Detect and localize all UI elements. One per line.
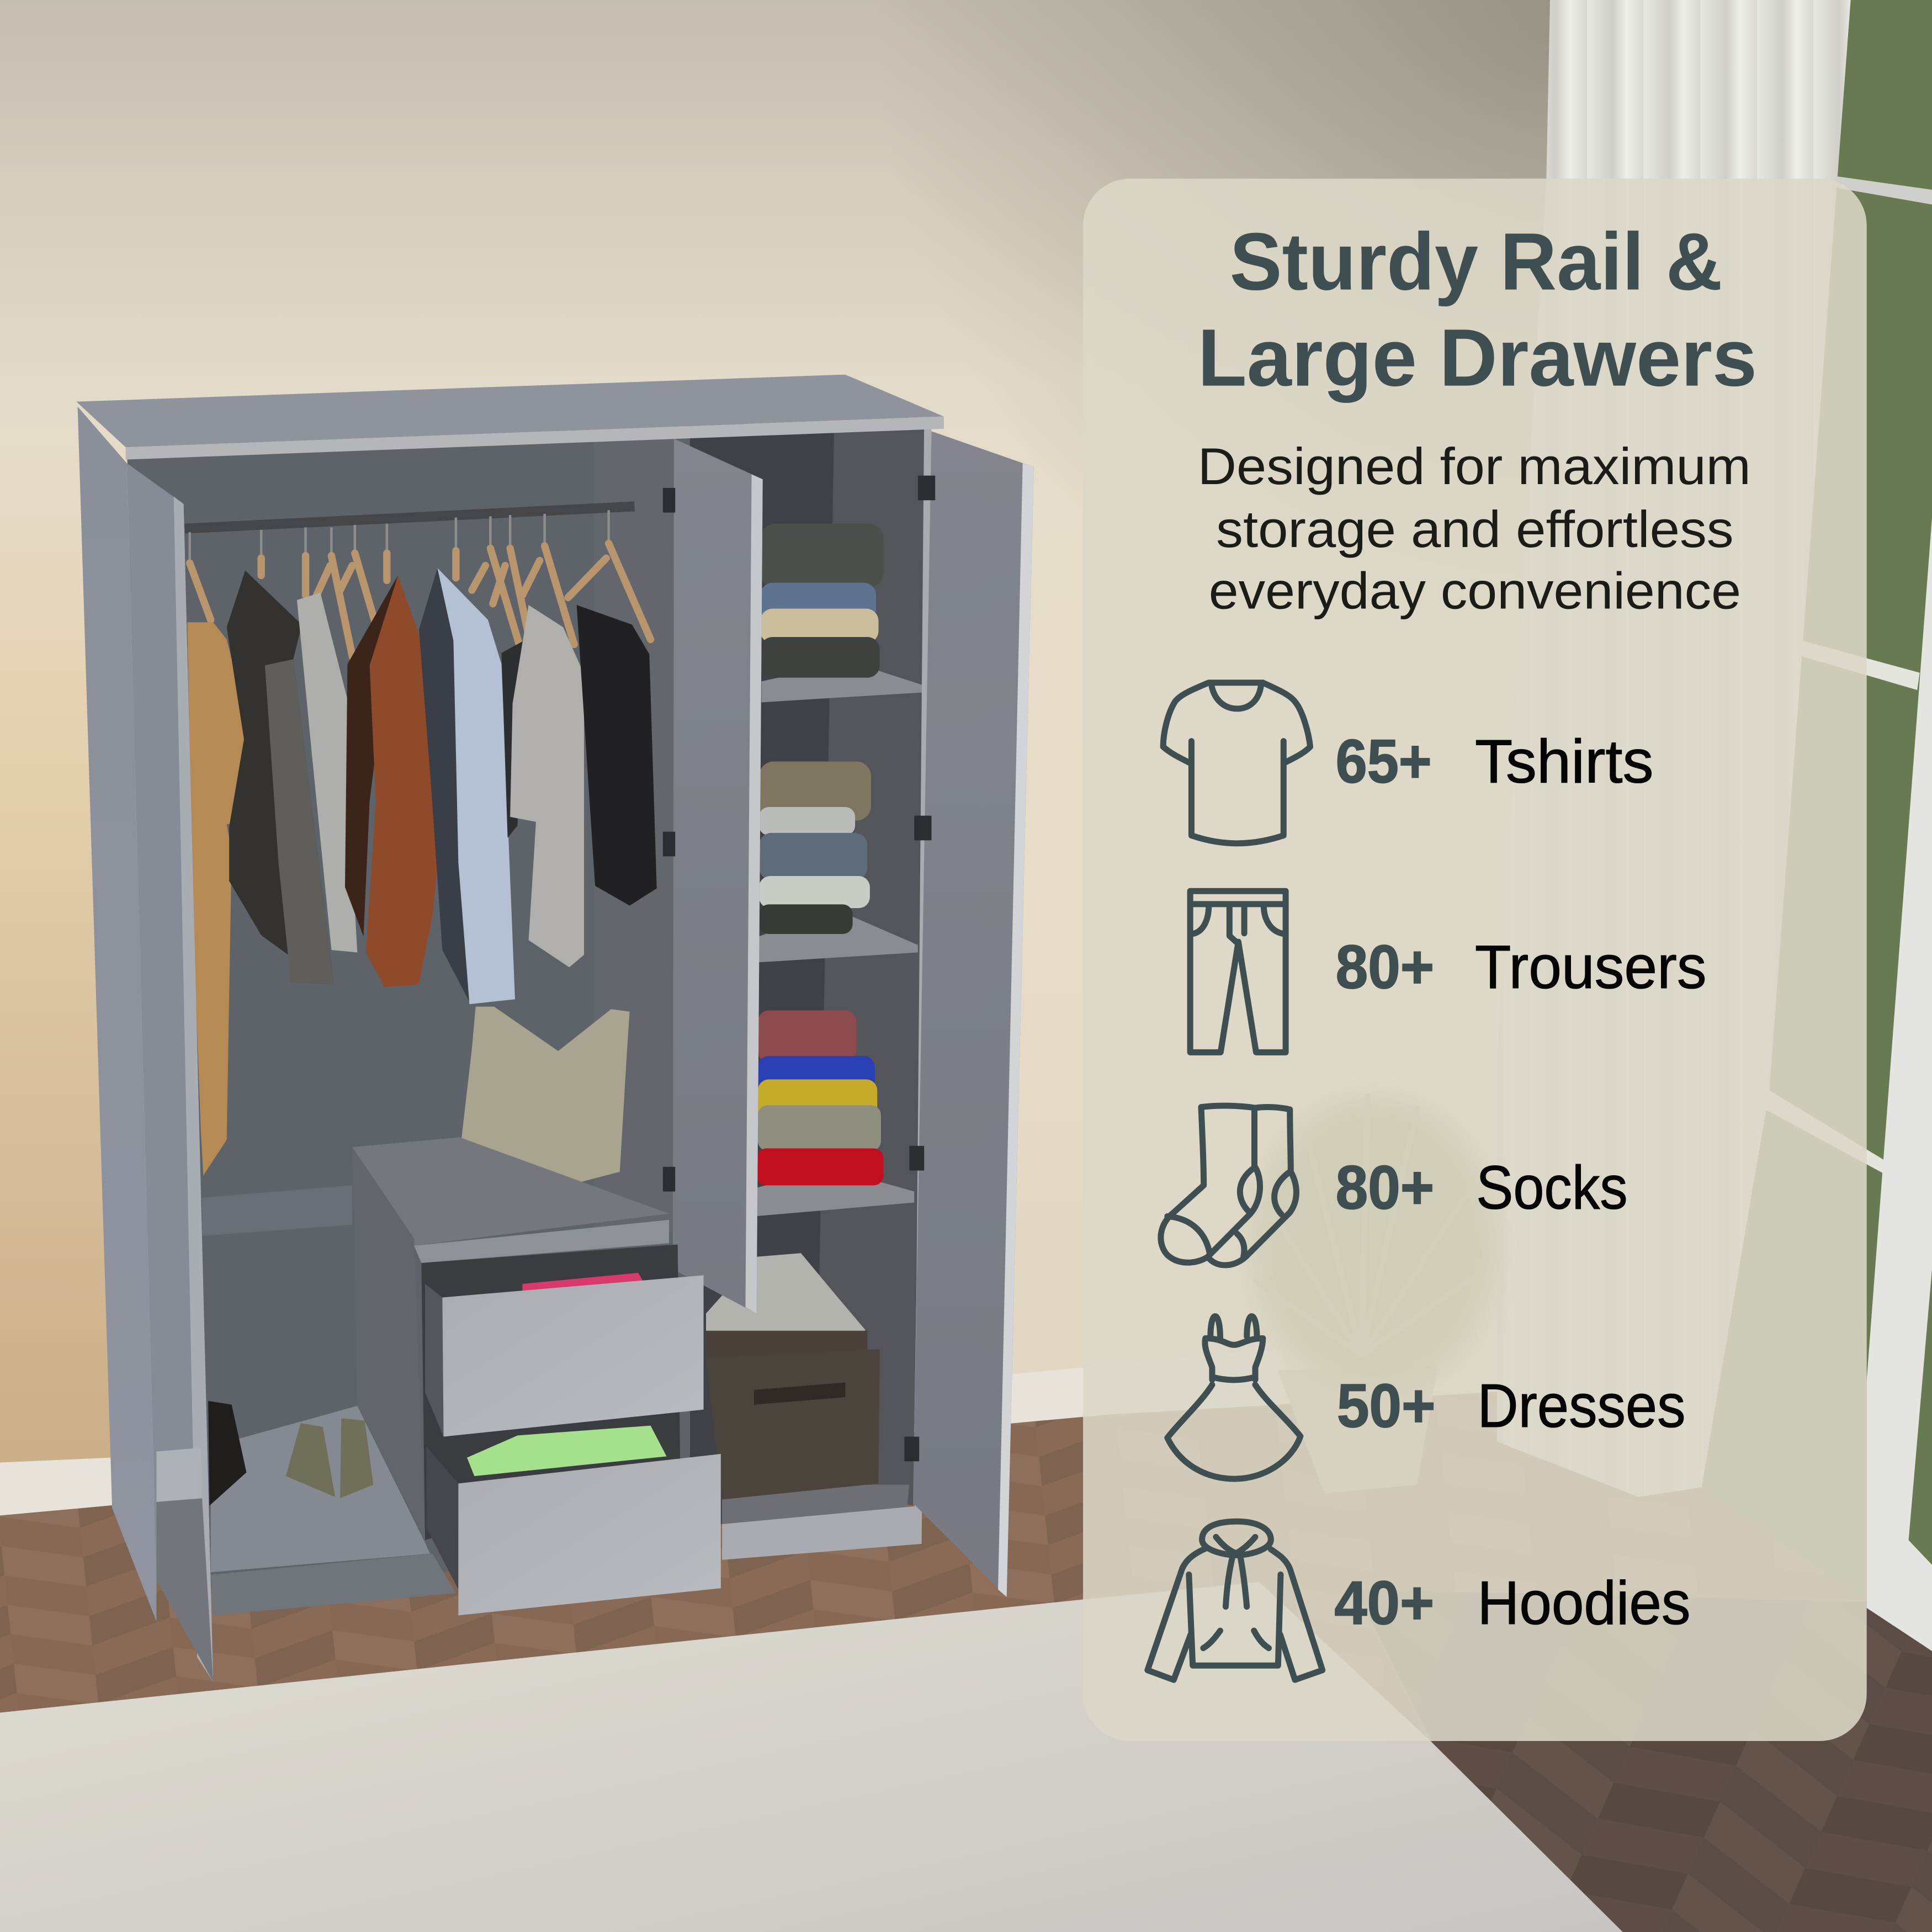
title: Large Drawers [1198,313,1757,404]
stat: dresses [1337,1371,1686,1440]
title: Sturdy Rail & [1230,217,1723,307]
right compartment [690,424,932,1560]
icon: hoodie [1148,1521,1323,1680]
basket and linen [706,1253,880,1500]
subtitle: storage and effortless [1216,500,1734,558]
stat: hoodies [1334,1568,1690,1637]
icon: trousers [1190,891,1286,1052]
icon: dress [1167,1317,1301,1479]
stat: trousers [1336,932,1707,1001]
stat: hoodies: 40+ [1334,1568,1434,1637]
stat: hoodies: Hoodies [1477,1568,1690,1637]
window bars [1833,176,1932,205]
door hinges [663,476,935,1461]
inner divider [594,428,675,1232]
stat: tshirts: Tshirts [1475,726,1654,795]
wardrobe [76,375,1034,1682]
stat: socks: Socks [1476,1153,1628,1222]
top panel [76,375,944,447]
right door [913,431,1034,1597]
title [1198,217,1757,404]
stat: tshirts: 65+ [1336,726,1432,795]
icon: socks [1161,1106,1296,1265]
subtitle [1198,437,1751,620]
drawer unit [352,1137,721,1615]
stat: trousers: Trousers [1475,932,1707,1001]
stat: dresses: Dresses [1477,1371,1686,1440]
floor of left compartment [211,1406,430,1572]
plant [1253,1097,1495,1493]
stat: trousers: 80+ [1336,932,1434,1001]
top drawer [522,1273,643,1291]
handbag [458,1007,630,1185]
plinth [211,1554,456,1615]
wood floor [0,1380,1932,1932]
stat: socks [1336,1153,1628,1222]
centre door [673,439,763,1313]
door post [914,426,932,1540]
subtitle: everyday convenience [1209,562,1741,620]
baseboard [0,1349,1281,1516]
left side panel [78,407,156,1621]
right plinth [722,1506,922,1560]
rug [0,1582,1623,1932]
icon: t-shirt [1163,683,1310,843]
stat: dresses: 50+ [1337,1371,1435,1440]
bottom drawer [426,1447,458,1589]
clothes rail [185,506,635,529]
shelves [761,662,923,702]
left door [127,463,213,1682]
hanging garments [187,568,657,1175]
info panel [1083,179,1867,1741]
back strip [202,1185,352,1236]
wooden hangers [190,543,651,657]
stat: tshirts [1336,726,1654,795]
stat: socks: 80+ [1336,1153,1434,1222]
dark floor at right [1355,1589,1932,1932]
interior back wall [127,424,690,1589]
white door frame [1867,518,1932,1651]
shoes [208,1401,373,1506]
curtain [1497,0,1851,1497]
subtitle: Designed for maximum [1198,437,1751,495]
hanger hooks [190,510,609,563]
window [1702,0,1932,1651]
folded stacks [757,524,883,1185]
